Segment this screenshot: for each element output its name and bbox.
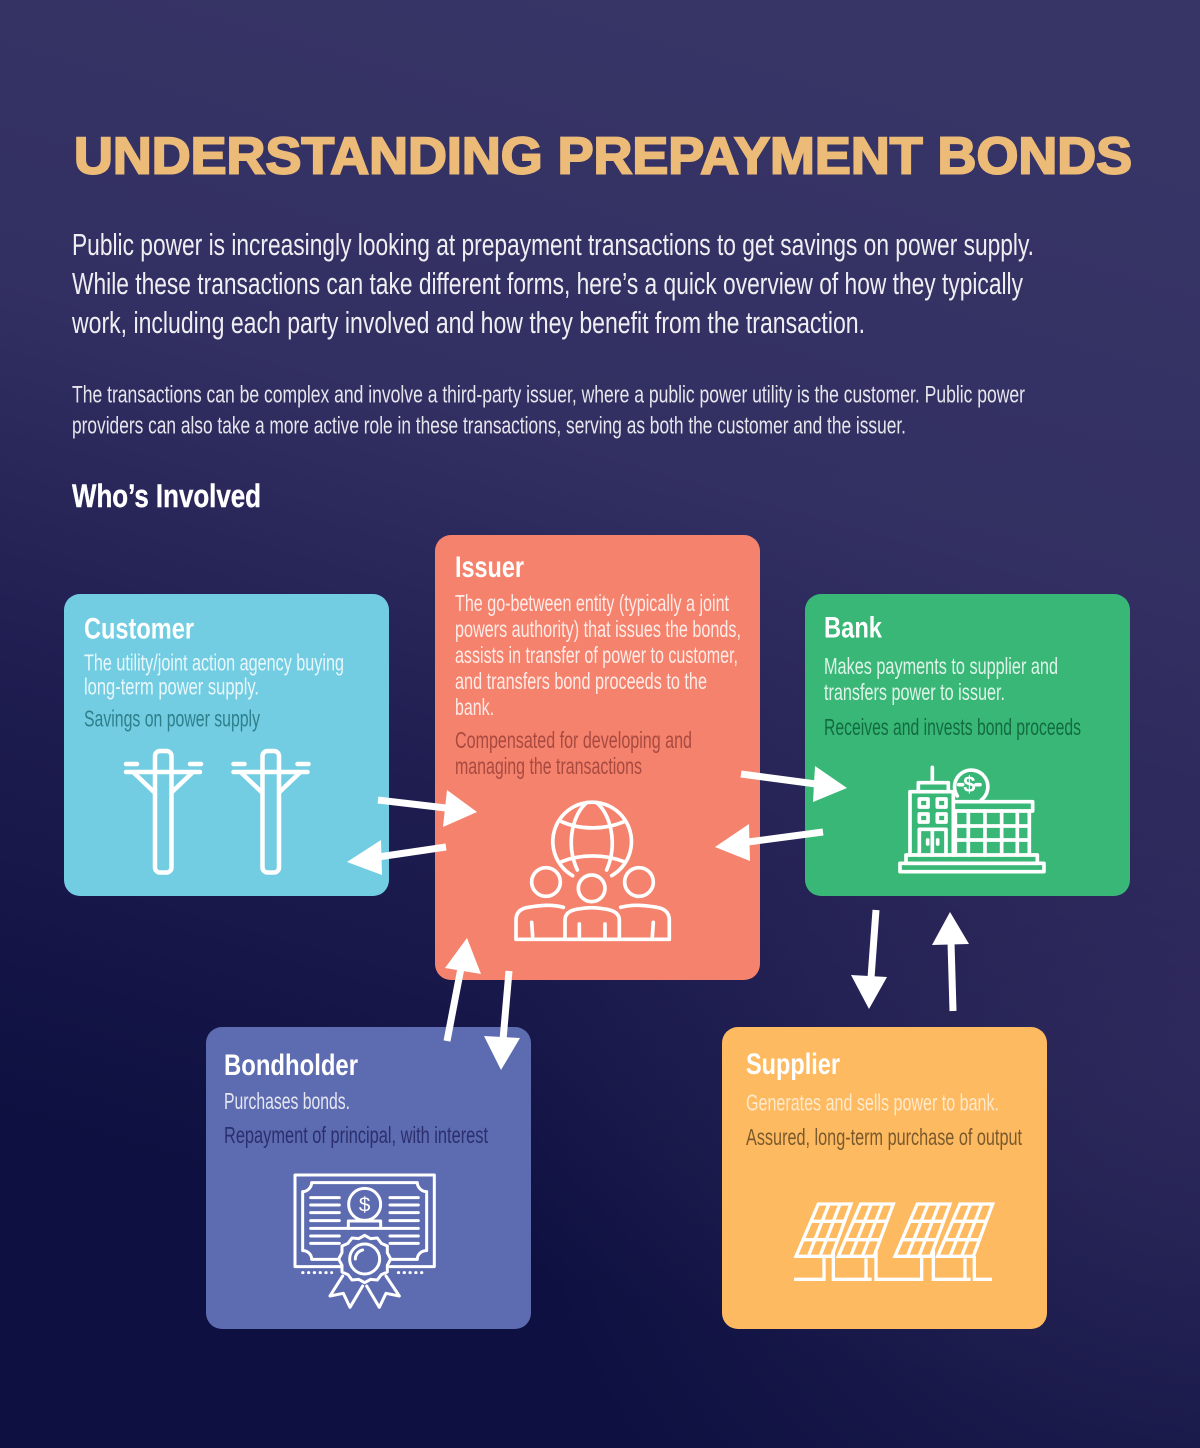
panel: issuer: managing the transactions xyxy=(455,753,642,779)
panel: customer: long-term power supply. xyxy=(84,674,259,700)
panel: bank: Receives and invests bond proceeds xyxy=(824,714,1081,740)
secondary paragraph: providers can also take a more active role in these transactions, serving as both the customer and the issuer. xyxy=(72,412,906,440)
icon: people and globe xyxy=(516,802,669,939)
icon: bank building xyxy=(900,767,1044,872)
icon: utility poles xyxy=(126,751,308,872)
panel: bank: Makes payments to supplier and xyxy=(824,653,1058,679)
panel: bondholder xyxy=(206,1027,531,1329)
arrow: customer to issuer xyxy=(378,790,477,827)
panel: bank xyxy=(805,594,1130,896)
icon: bank building: $ xyxy=(963,772,975,797)
panel: bondholder: Repayment of principal, with interest xyxy=(224,1122,488,1148)
panel: customer: Savings on power supply xyxy=(84,706,260,732)
arrow: supplier to bank xyxy=(932,912,969,1011)
icon: bond certificate: $ xyxy=(359,1194,371,1217)
title: UNDERSTANDING PREPAYMENT BONDS xyxy=(74,128,1132,186)
panel: issuer: bank. xyxy=(455,694,494,720)
panel: supplier: Assured, long-term purchase of output xyxy=(746,1124,1022,1150)
panel: customer: Customer xyxy=(84,612,194,646)
section heading: who's involved: Who’s Involved xyxy=(72,478,261,514)
panel: bank: transfers power to issuer. xyxy=(824,679,1005,705)
panel: bondholder: Purchases bonds. xyxy=(224,1088,350,1114)
intro paragraph: work, including each party involved and how they benefit from the transaction. xyxy=(71,305,865,340)
icon: bond certificate xyxy=(295,1175,434,1307)
intro paragraph xyxy=(71,227,1034,340)
panel: issuer: assists in transfer of power to customer, xyxy=(455,642,738,668)
panel: customer: The utility/joint action agency buying xyxy=(84,650,344,676)
icon: solar panels xyxy=(794,1204,993,1279)
panel: issuer xyxy=(435,535,760,980)
arrow: issuer to bondholder xyxy=(484,971,520,1070)
panel: issuer: and transfers bond proceeds to the xyxy=(455,668,707,694)
panel: issuer: The go-between entity (typically a joint xyxy=(455,590,729,616)
arrow: bank to supplier xyxy=(851,910,887,1009)
arrow: bank to issuer xyxy=(715,824,823,861)
arrow: bondholder to issuer xyxy=(445,938,481,1041)
panel: supplier: Supplier xyxy=(746,1048,840,1081)
panel: supplier: Generates and sells power to bank. xyxy=(746,1090,999,1116)
panel: issuer: powers authority) that issues the bonds, xyxy=(455,616,741,642)
arrow: issuer to customer xyxy=(347,840,446,875)
panel: customer xyxy=(64,594,389,896)
secondary paragraph xyxy=(72,382,1025,440)
panel: bondholder: Bondholder xyxy=(224,1049,358,1082)
arrow: issuer to bank xyxy=(741,766,847,802)
panel: issuer: Issuer xyxy=(455,551,524,584)
panel: issuer: Compensated for developing and xyxy=(455,727,692,753)
panel: supplier xyxy=(722,1027,1047,1329)
panel: bank: Bank xyxy=(824,612,882,644)
